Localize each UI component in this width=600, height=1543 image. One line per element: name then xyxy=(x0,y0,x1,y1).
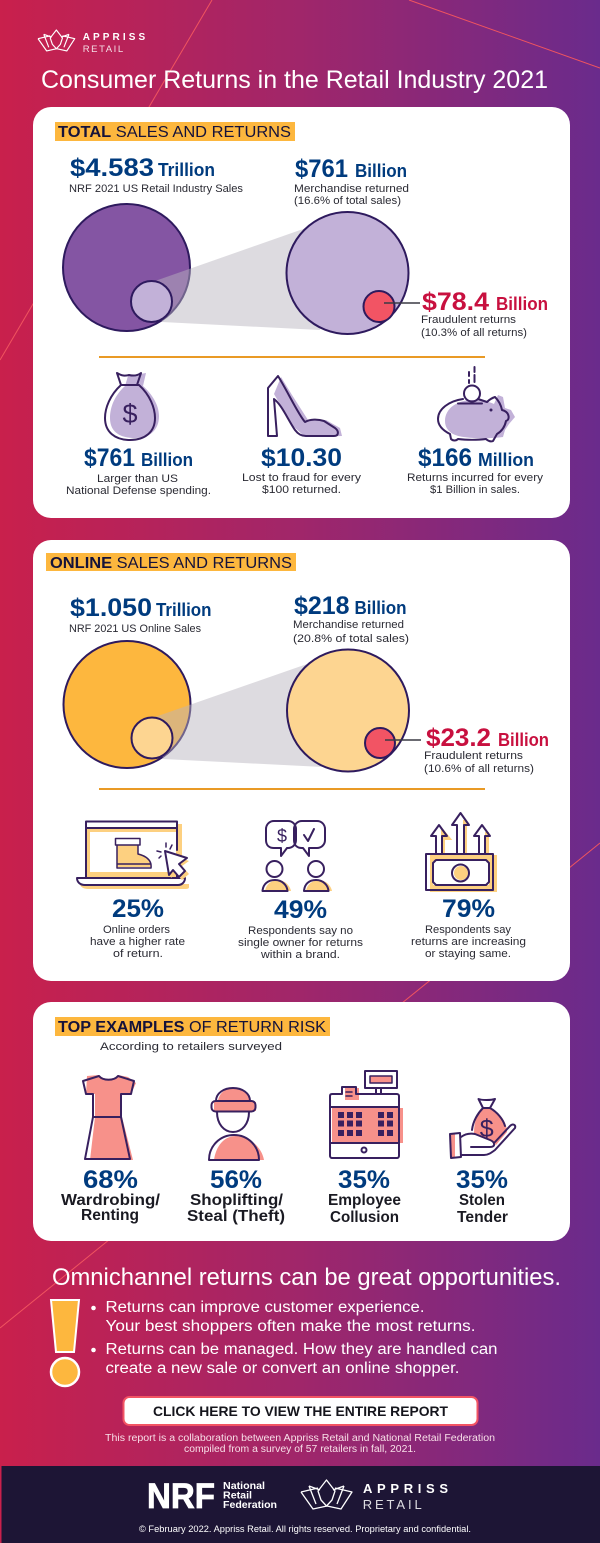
stat: online merchandise returned: $218 xyxy=(294,592,350,620)
stat: 49 percent xyxy=(238,896,364,961)
stat: online fraudulent returns: Fraudulent returns xyxy=(424,750,524,762)
stat: 25 percent: 25% xyxy=(112,895,164,923)
stat: 25 percent xyxy=(90,895,185,960)
stat: online sales: NRF 2021 US Online Sales xyxy=(69,623,201,635)
stat: 761 billion xyxy=(66,444,211,497)
stat: 761 billion: $761 xyxy=(84,444,135,472)
panel: total sales and returns xyxy=(33,107,570,518)
stat: online fraudulent returns: (10.6% of all returns) xyxy=(424,763,534,775)
logo: NRF: Federation xyxy=(223,1500,277,1511)
text: collaboration note: This report is a collaboration between Appriss Retail and National Retail Federation xyxy=(105,1433,495,1444)
chart: nested circles, total sales xyxy=(63,204,420,334)
stat: 49 percent: single owner for returns xyxy=(238,937,364,949)
stat: 79 percent: 79% xyxy=(442,895,495,923)
stat: stolen tender: 35% xyxy=(456,1166,508,1194)
heading: top examples of return risk: TOP EXAMPLES OF RETURN RISK xyxy=(58,1019,326,1036)
stat: stolen tender: Tender xyxy=(457,1209,508,1226)
stat: wardrobing: Wardrobing/ xyxy=(61,1192,161,1209)
stat: employee collusion xyxy=(328,1166,401,1226)
stat: online merchandise returned xyxy=(293,592,409,645)
stat: 761 billion: Larger than US xyxy=(97,473,178,485)
chart: nested circles, online sales xyxy=(64,641,421,772)
stat: 10.30 xyxy=(242,444,362,496)
stat: online sales: $1.050 xyxy=(70,594,152,622)
button: view the report: CLICK HERE TO VIEW THE ENTIRE REPORT xyxy=(153,1403,448,1419)
icon: dress xyxy=(83,1075,136,1160)
logo: Appriss Retail footer: APPRISS xyxy=(363,1481,448,1496)
icon: hand holding money bag: $ xyxy=(480,1115,494,1143)
stat: 25 percent: have a higher rate xyxy=(90,936,185,948)
stat: 10.30: Lost to fraud for every xyxy=(242,472,362,484)
stat: shoplifting: Steal (Theft) xyxy=(187,1208,285,1225)
icon: two people with speech bubbles: $ xyxy=(277,826,287,846)
stat: 166 million: $166 xyxy=(418,444,472,472)
stat: merchandise returned: Billion xyxy=(355,161,407,181)
title: Consumer Returns in the Retail Industry 2021 xyxy=(41,66,548,94)
stat: total retail sales: Trillion xyxy=(158,160,215,180)
icon: high heel shoe xyxy=(268,376,342,437)
stat: 761 billion: National Defense spending. xyxy=(66,485,211,497)
icon: piggy bank xyxy=(438,367,515,441)
stat: 25 percent: Online orders xyxy=(103,924,170,936)
logo: Appriss Retail footer: RETAIL xyxy=(363,1497,422,1512)
stat: stolen tender: Stolen xyxy=(459,1192,505,1209)
stat: 761 billion: Billion xyxy=(141,450,193,470)
logo: Appriss Retail header: APPRISS xyxy=(83,32,146,43)
panel: top examples of return risk xyxy=(33,1002,570,1241)
stat: fraudulent returns: (10.3% of all returns) xyxy=(421,327,527,339)
icon: exclamation mark xyxy=(51,1300,79,1386)
stat: 10.30: $100 returned. xyxy=(262,484,341,496)
stat: 166 million: Million xyxy=(478,450,534,470)
stat: 79 percent xyxy=(411,895,526,960)
text block: opportunity bullets: Returns can be managed. How they are handled can xyxy=(106,1341,498,1358)
text block: opportunity bullets: Your best shoppers often make the most returns. xyxy=(106,1318,476,1335)
stat: employee collusion: Collusion xyxy=(330,1209,399,1226)
text block: opportunity bullets: Returns can improve customer experience. xyxy=(106,1299,424,1316)
stat: 49 percent: 49% xyxy=(274,896,327,924)
stat: fraudulent returns: Billion xyxy=(496,294,548,314)
icon: cash register xyxy=(330,1071,403,1158)
logo: Appriss Retail footer xyxy=(301,1480,448,1512)
stat: online fraudulent returns: Billion xyxy=(498,730,549,750)
stat: 166 million: $1 Billion in sales. xyxy=(430,484,520,496)
stat: merchandise returned: Merchandise returned xyxy=(294,183,409,195)
stat: merchandise returned: $761 xyxy=(295,155,348,183)
text: copyright: © February 2022. Appriss Retail. All rights reserved. Proprietary and confidential. xyxy=(139,1524,471,1534)
stat: fraudulent returns xyxy=(421,288,548,339)
icon: hand holding money bag xyxy=(450,1099,515,1158)
stat: fraudulent returns: Fraudulent returns xyxy=(421,314,517,326)
stat: 10.30: $10.30 xyxy=(261,444,342,472)
stat: total retail sales: $4.583 xyxy=(70,154,154,182)
stat: 166 million: Returns incurred for every xyxy=(407,472,544,484)
stat: online fraudulent returns: $23.2 xyxy=(426,724,491,752)
icon: two people with speech bubbles xyxy=(262,821,332,891)
heading: total sales and returns: TOTAL SALES AND RETURNS xyxy=(58,124,291,141)
icon: money bag xyxy=(105,373,159,440)
text block: opportunity bullets xyxy=(91,1299,497,1377)
stat: online fraudulent returns xyxy=(424,724,549,775)
logo: NRF: NRF xyxy=(147,1477,215,1516)
stat: online sales xyxy=(69,594,212,635)
stat: fraudulent returns: $78.4 xyxy=(422,288,489,316)
text: survey note: According to retailers surveyed xyxy=(100,1041,282,1053)
stat: 79 percent: returns are increasing xyxy=(411,936,526,948)
stat: 166 million xyxy=(407,444,544,496)
heading: omnichannel opportunities: Omnichannel returns can be great opportunities. xyxy=(52,1264,561,1291)
stat: merchandise returned: (16.6% of total sales) xyxy=(294,195,401,207)
icon: money with rising arrows xyxy=(426,813,497,892)
logo: NRF: National xyxy=(223,1481,265,1492)
stat: 79 percent: Respondents say xyxy=(425,924,512,936)
stat: total retail sales xyxy=(69,154,243,195)
icon: shoplifter xyxy=(209,1088,264,1160)
logo: NRF: Retail xyxy=(223,1490,252,1502)
text: collaboration note: compiled from a survey of 57 retailers in fall, 2021. xyxy=(184,1444,416,1455)
stat: wardrobing xyxy=(61,1166,161,1224)
stat: employee collusion: 35% xyxy=(338,1166,390,1194)
stat: total retail sales: NRF 2021 US Retail Industry Sales xyxy=(69,183,243,195)
stat: shoplifting xyxy=(187,1166,285,1225)
stat: 49 percent: Respondents say no xyxy=(248,925,353,937)
text block: opportunity bullets: create a new sale or convert an online shopper. xyxy=(106,1360,459,1377)
stat: 49 percent: within a brand. xyxy=(260,949,340,961)
text: collaboration note xyxy=(105,1433,495,1455)
stat: wardrobing: Renting xyxy=(81,1207,139,1224)
stat: 25 percent: of return. xyxy=(113,948,163,960)
footer xyxy=(2,1466,600,1543)
stat: stolen tender xyxy=(456,1166,508,1226)
stat: wardrobing: 68% xyxy=(83,1166,138,1194)
stat: 79 percent: or staying same. xyxy=(425,948,511,960)
stat: online merchandise returned: (20.8% of total sales) xyxy=(293,633,409,645)
stat: shoplifting: 56% xyxy=(210,1166,262,1194)
logo: Appriss Retail header xyxy=(38,30,146,55)
stat: online sales: Trillion xyxy=(156,600,212,620)
stat: employee collusion: Employee xyxy=(328,1192,401,1209)
panel: online sales and returns xyxy=(33,540,570,981)
stat: online merchandise returned: Merchandise returned xyxy=(293,619,404,631)
logo: Appriss Retail header: RETAIL xyxy=(83,44,123,55)
logo: NRF xyxy=(147,1477,277,1516)
icon: laptop with boot and cursor xyxy=(77,822,189,889)
button: view the report xyxy=(124,1397,478,1425)
heading: online sales and returns: ONLINE SALES AND RETURNS xyxy=(50,555,292,572)
icon: money bag: $ xyxy=(122,399,138,429)
stat: merchandise returned xyxy=(294,155,409,207)
stat: online merchandise returned: Billion xyxy=(354,598,406,618)
stat: shoplifting: Shoplifting/ xyxy=(190,1192,284,1209)
